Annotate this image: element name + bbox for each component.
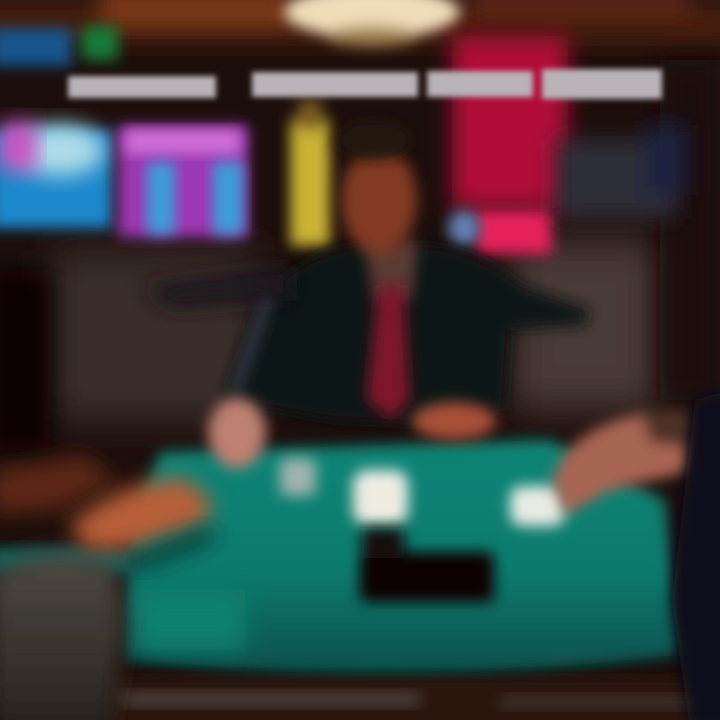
dealer neck and shirt bbox=[364, 240, 418, 300]
dealer hands bbox=[208, 398, 496, 468]
dealer: suit, head and tie bbox=[140, 120, 590, 425]
dealer suit bbox=[225, 245, 590, 425]
right screen: grey blue panel bbox=[556, 125, 687, 218]
dealer hair bbox=[336, 120, 412, 160]
dealer head bbox=[341, 146, 417, 254]
player sleeve: grey lower left bbox=[0, 552, 125, 720]
red and pink banner bbox=[448, 36, 568, 254]
left screen: blue and magenta displays bbox=[0, 26, 248, 237]
dealer tie bbox=[366, 285, 410, 420]
player hand: right side bbox=[552, 410, 692, 515]
yellow column bbox=[290, 100, 330, 246]
table rail: wooden edge bbox=[100, 678, 720, 720]
chips: black stack bbox=[360, 528, 494, 602]
suit edge highlight bbox=[235, 300, 268, 392]
left hand bbox=[70, 478, 212, 552]
ceiling light: white glow bbox=[284, 0, 460, 46]
suit arm left bbox=[140, 265, 290, 310]
upper left arm bbox=[0, 455, 118, 515]
player sleeve: right dark navy bbox=[672, 390, 720, 720]
table: teal felt bbox=[0, 440, 680, 676]
playing cards: white glow bbox=[280, 458, 565, 526]
player arms: left side bbox=[0, 455, 215, 568]
sign text: blurred white lettering bbox=[68, 69, 662, 99]
shadow beneath hand bbox=[125, 528, 215, 568]
